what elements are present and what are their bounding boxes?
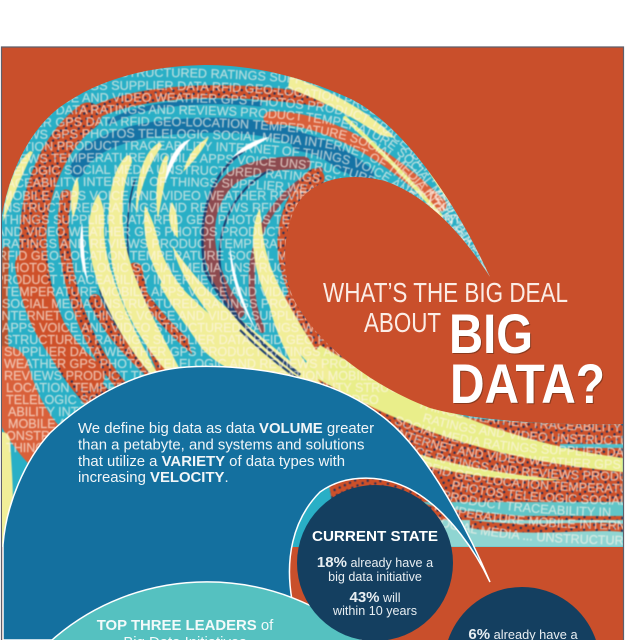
definition text: that utilize a VARIETY of data types with [78, 454, 345, 470]
data word rows: SOCIAL MEDIA ... UNSTRUCTURED [437, 516, 623, 546]
data word rows: REVIEWS GPS PHOTOS TELELOGIC SOCIAL MEDIA INTERNET OF THINGS VOICE AND RATINGS [30, 128, 442, 218]
data word rows: STRUCTURED RATINGS SUPPLIER DATA RFID GEO PHOTOS TRACEABILITY PRODUCT [4, 333, 529, 347]
data word rows: SOCIAL MEDIA RATINGS SUPPLIER DATA GPS [394, 416, 623, 458]
definition text: We define big data as data VOLUME greater [78, 421, 374, 437]
title: ABOUT [364, 307, 441, 338]
panel: current state circle: within 10 years [332, 604, 417, 618]
wave illustration with data words [2, 65, 623, 547]
data word rows: TEMPERATURE MOBILE APPS VOICE AND VIDEO WEATHER GPS RFID GEO-LOCATION [3, 285, 527, 299]
data word rows: RFID GEO-LOCATION TEMPERATURE TELELOGIC [425, 461, 623, 494]
data word rows: LOCATION PRODUCT TRACEABILITY INTERNET OF THINGS VOICE AND VIDEO RATINGS AND GEO [23, 140, 415, 196]
data word rows: THINGS SUPPLIER DATA RFID GEO PHOTOS TELELOGIC TRACEABILITY INTERNET [2, 213, 504, 227]
data word rows: SUPPLIER DATA RATINGS AND REVIEWS PRODUCT TEMPERATURE SOCIAL MEDIA THINGS AND [50, 104, 490, 276]
data word rows: RFID GEO-LOCATION TEMPERATURE SOCIAL MEDIA UNSTRUCTURED THINGS DATA [0, 249, 511, 263]
yellow brush strokes [3, 76, 458, 400]
data word rows: LOCATION TEMPERATURE SOCIAL MEDIA TRACEABILITY STRUCTURED THINGS [6, 381, 493, 395]
data word rows: INTERNET AND VIDEO WEATHER GPS PHOTOS [397, 427, 621, 470]
title: BIG [449, 302, 533, 365]
tail of the wave [305, 342, 623, 547]
panel: current state circle: big data initiative [328, 570, 422, 584]
panel: current state circle [297, 485, 453, 640]
data word rows: THINGS SUPPLIER DATA RFID GEO-LOCATION PRODUCT TUNING AND VIDEO GPS [87, 80, 382, 120]
panel: top three leaders circle: TOP THREE LEADERS of [97, 618, 274, 634]
data word rows: PRODUCT TRACEABILITY INTERNET OF THINGS VOICE SUPPLIER DATA REVIEWS [0, 273, 492, 287]
data word rows: RATINGS AND VIDEO UNSTRUCTURED RATINGS [422, 413, 623, 446]
data word rows: THINGS [6, 441, 54, 455]
panel: current state circle: 43% will [349, 589, 401, 606]
data word rows: PRODUCT TRACEABILITY IN [444, 490, 611, 518]
panel: current state circle: 18% already have a [317, 554, 433, 571]
title: DATA? [450, 352, 605, 415]
definition text: than a petabyte, and systems and solutions [78, 438, 364, 454]
data word rows: VOICE RATINGS AND REVIEWS PRODUCT TEMP [414, 445, 623, 482]
data word rows: ONSTRUCTURED [6, 429, 112, 443]
data word rows: TEMPERATURE MOBILE INTERNET [434, 506, 623, 530]
white brush strokes [80, 137, 269, 330]
panel: current state circle: CURRENT STATE [312, 528, 438, 545]
data word rows: WEATHER GPS DATA RFID GEO-LOCATION TEMPERATURE SOCIAL MEDIA INTERNET OF VOICE [39, 116, 470, 249]
panel: blue definition shape [3, 366, 490, 640]
title: WHAT’S THE BIG DEAL [323, 277, 568, 308]
panel: second statistic circle [448, 587, 596, 640]
data word rows: RATINGS AND REVIEWS PRODUCT TEMPERATURE MOBILE UNSTRUCTURED RATINGS [2, 237, 529, 251]
data word rows: TELELOGIC SOCIAL MEDIA UNSTRUCTURED RATINGS SUPPLIER DATA WEATHER [12, 164, 342, 184]
definition text: increasing VELOCITY. [78, 470, 229, 486]
data word rows: WEATHER GPS PHOTOS TELELOGIC AND REVIEWS PRODUCT TRACEABILITY VOICE [4, 357, 518, 371]
data word rows: AND VIDEO WEATHER GPS PHOTOS PRODUCT TRACEABILITY MOBILE APPS VOICE [0, 225, 506, 239]
data word rows: REVIEWS PRODUCT TEMPERATURE GEO-LOCATION MOBILE APPS UNSTRUCTURED [4, 369, 520, 383]
data word rows: MOBILE APPS VOICE [8, 417, 135, 431]
title [323, 277, 605, 415]
data word rows: VOICE AND VIDEO WEATHER GPS PHOTOS PRODUCT TRACEABILITY TEMPERATURE MEDIA [66, 92, 490, 276]
data word rows: SOCIAL MEDIA UNSTRUCTURED RATINGS PRODUCT RATINGS AND REVIEWS PHOTOS [2, 297, 529, 311]
data word rows: UNSTRUCTURED RATINGS AND REVIEWS RFID GEO-LOCATION TELELOGIC SOCIAL [0, 201, 504, 215]
data word rows: APPS VOICE AND VIDEO STRUCTURED RATINGS WEATHER GPS SOCIAL MEDIA [2, 321, 488, 335]
data word rows: TELELOGIC SOCIAL INTERNET OF THINGS VOICE AND VIDEO [6, 393, 379, 407]
data word rows: MOBILE APPS VOICE AND VIDEO WEATHER REVIEWS GPS PRODUCT TEMPERATURE [2, 189, 521, 203]
data word rows: TRACEABILITY INTERNET OF THINGS SUPPLIER WEATHER GPS PHOTOS [8, 176, 318, 194]
data word rows: ABILITY INTERNET VOICE [8, 405, 164, 419]
data word rows: REVIEWS TEMPERATURE MOBILE APPS VOICE UNSTRUCTURED RATINGS SUPPLIER DATA [18, 152, 382, 180]
data word rows: PHOTOS TELELOGIC SOCIAL MEDIA UNSTRUCTURED RATINGS VOICE AND VIDEO [2, 261, 503, 275]
data word rows: SUPPLIER DATA WEATHER GPS PRODUCT RATINGS AND REVIEWS INTERNET OF THINGS [4, 345, 550, 359]
panel: top three leaders circle [52, 582, 362, 640]
data word rows: INTERNET OF THINGS VOICE AND VIDEO SUPPLIER DATA TEMPERATURE TELELOGIC [0, 309, 519, 323]
data word rows: PHOTOS TELELOGIC SOCIAL MEDIA [451, 480, 623, 506]
